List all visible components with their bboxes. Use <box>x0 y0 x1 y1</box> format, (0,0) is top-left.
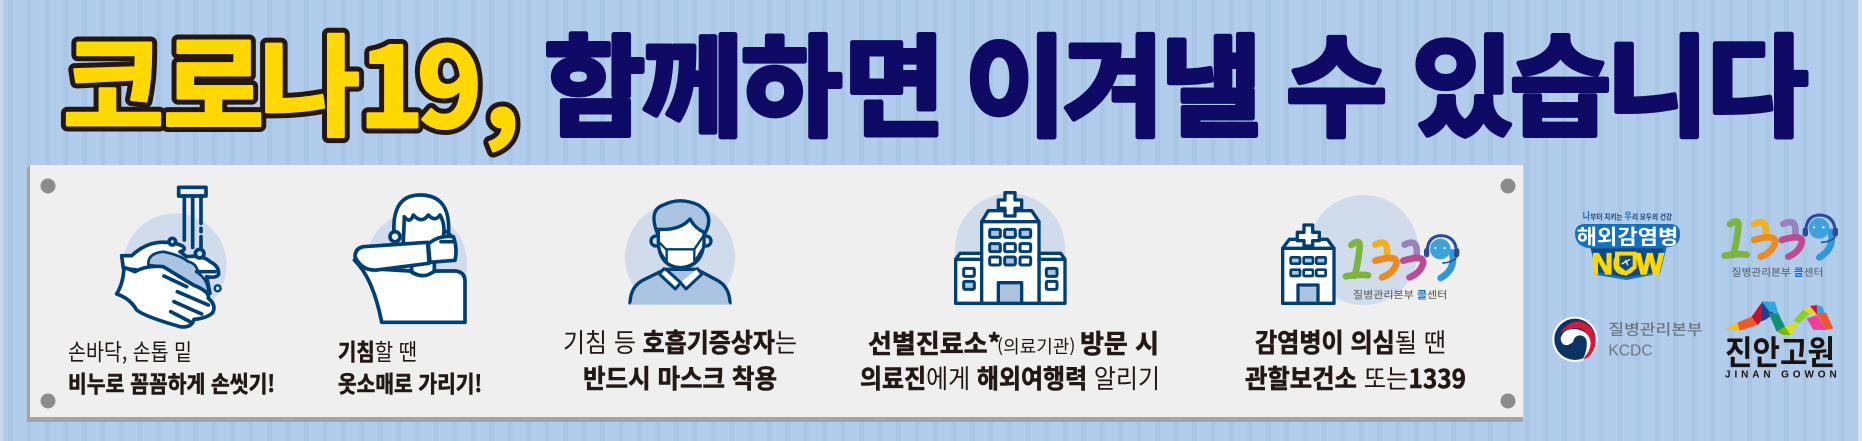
logo: overseas infection NOW <box>1575 208 1680 281</box>
icon: person with mask <box>625 201 735 305</box>
icon: hand washing <box>117 187 227 327</box>
text: cough: 기침할 땐 <box>338 333 417 367</box>
text: mask <box>563 323 797 396</box>
text: call 1339 <box>1245 323 1466 396</box>
logo: KCDC: 질병관리본부 <box>1608 318 1703 339</box>
logo: overseas infection NOW: 해외감염병 <box>1577 220 1678 250</box>
logo: Jinan Gowon: JINAN GOWON <box>1725 369 1837 380</box>
text: call 1339: 감염병이 의심될 땐 <box>1255 323 1446 360</box>
text: screening clinic <box>860 324 1160 396</box>
logo: overseas infection NOW: 나부터 지키는 우리 모두의 건강 <box>1583 208 1672 222</box>
text: mask: 기침 등 호흡기증상자는 <box>563 323 797 360</box>
text: cough: 옷소매로 가리기! <box>338 365 482 399</box>
logo: 1339: 질병관리본부 콜센터 <box>1732 264 1823 279</box>
text: hand washing: 비누로 꼼꼼하게 손씻기! <box>68 365 275 399</box>
text: cough <box>338 333 482 399</box>
icon: hospital <box>955 193 1065 303</box>
text: hand washing <box>68 333 275 399</box>
title: highlighted word: 코로나19, <box>63 0 520 159</box>
rivets <box>40 178 1516 408</box>
logos <box>1552 208 1838 380</box>
title <box>63 0 1808 159</box>
logo: KCDC: KCDC <box>1608 343 1653 360</box>
logo: 1339 <box>1725 215 1838 279</box>
logo: Jinan Gowon: 진안고원 <box>1725 326 1835 375</box>
text: screening clinic: (의료기관) <box>997 333 1075 359</box>
text: mask: 반드시 마스크 착용 <box>583 359 777 396</box>
logo: KCDC <box>1552 317 1703 362</box>
text: screening clinic: 의료진에게 해외여행력 알리기 <box>860 359 1160 396</box>
logo: Jinan Gowon <box>1725 302 1837 380</box>
title: navy text: 함께하면이겨낼수있습니다 <box>544 0 1808 159</box>
icon: hospital with 1339: 질병관리본부 콜센터 <box>1353 286 1447 301</box>
text: call 1339: 관할보건소 또는1339 <box>1245 359 1466 396</box>
logo: overseas infection NOW: NOW <box>1592 248 1664 281</box>
icon: cough into sleeve <box>354 195 467 322</box>
text: hand washing: 손바닥, 손톱 밑 <box>68 333 192 367</box>
text: screening clinic: 선별진료소* <box>868 324 1001 361</box>
title: 코로나19, <box>63 0 520 159</box>
icon: hospital with 1339 <box>1283 195 1459 305</box>
text: screening clinic: 방문 시 <box>1080 324 1159 361</box>
panel: prevention rules <box>27 165 1523 422</box>
logo: 1339 call center <box>1346 236 1459 278</box>
